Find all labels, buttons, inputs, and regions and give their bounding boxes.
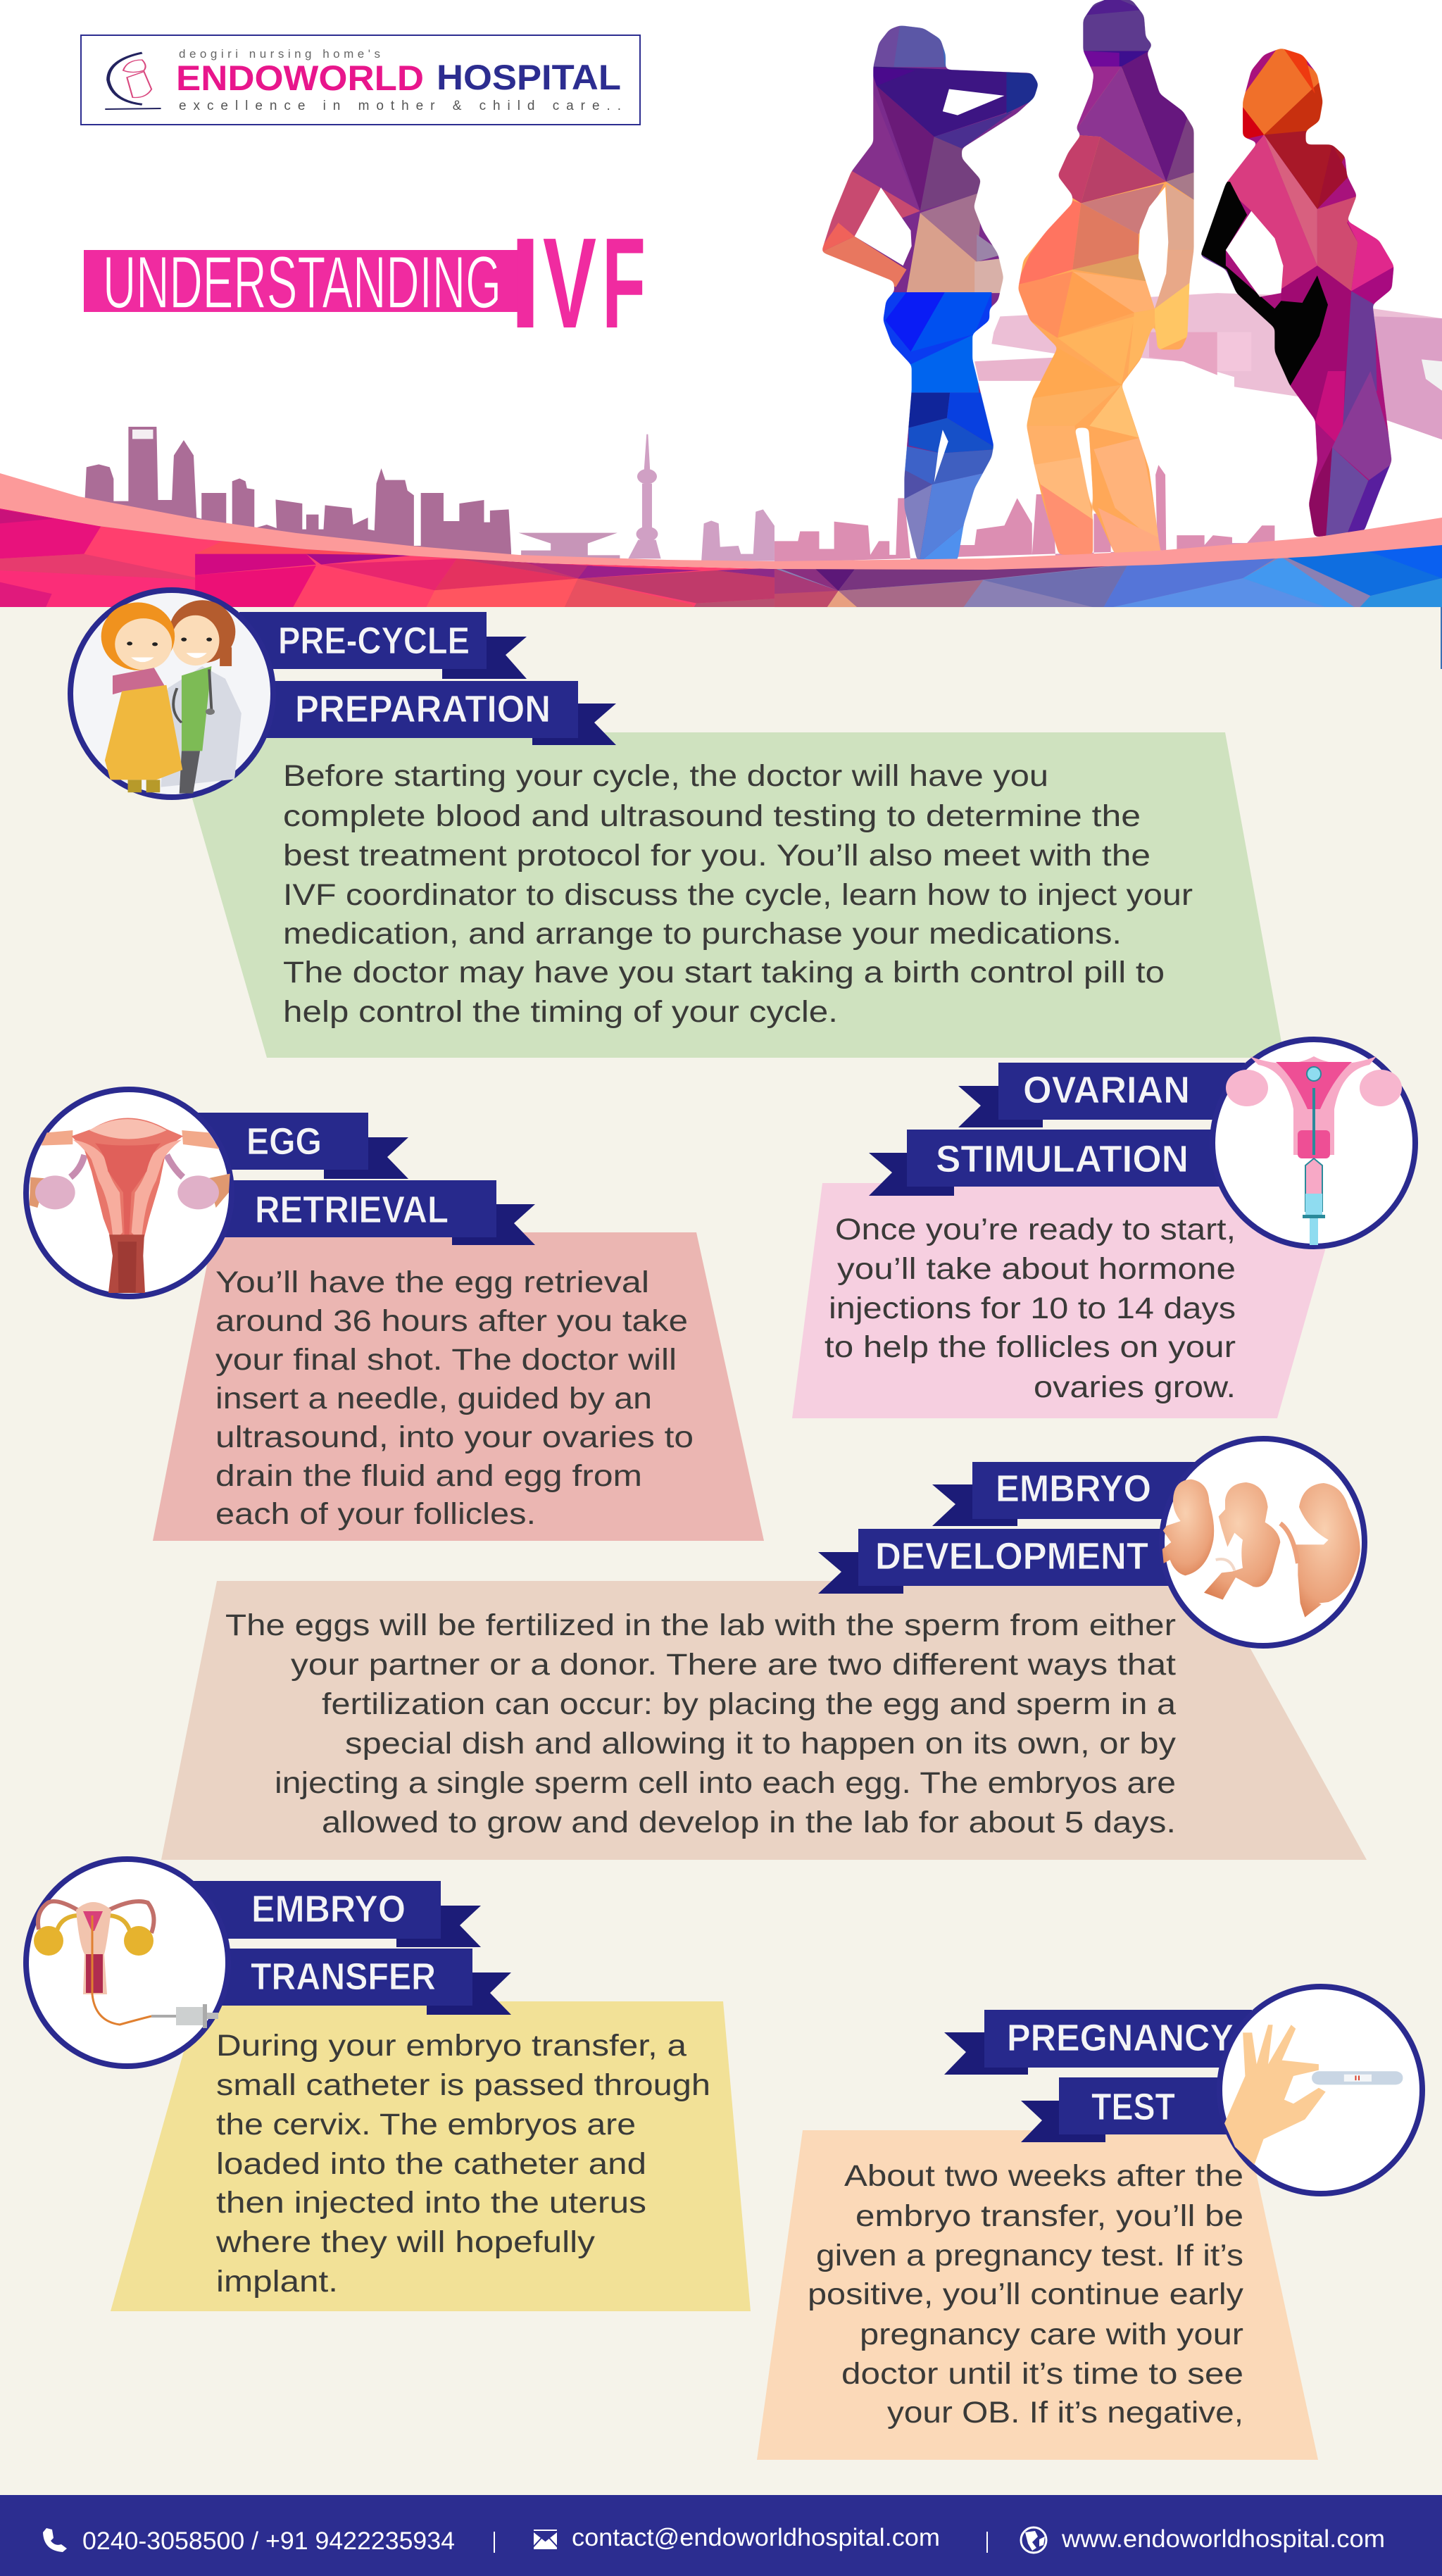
icon: globe bbox=[1021, 2527, 1046, 2553]
icon: patient and doctor bbox=[70, 590, 273, 797]
body text: allowed to grow and develop in the lab for about 5 days. bbox=[322, 1806, 1176, 1839]
title word: IVF: I bbox=[510, 211, 541, 355]
body text: Once you’re ready to start, bbox=[835, 1213, 1236, 1246]
silhouette: central pregnant woman bbox=[1013, 0, 1200, 563]
ribbon: pregnancy bbox=[944, 2010, 1252, 2075]
body text bbox=[283, 759, 1193, 1029]
body text: The eggs will be fertilized in the lab with the sperm from either bbox=[225, 1608, 1176, 1642]
body text: ultrasound, into your ovaries to bbox=[215, 1420, 694, 1454]
body text: special dish and allowing it to happen on its own, or by bbox=[345, 1727, 1177, 1761]
body text: injections for 10 to 14 days bbox=[829, 1292, 1236, 1325]
panel: pink bbox=[792, 1183, 1344, 1418]
ribbon: egg: EGG bbox=[246, 1120, 322, 1163]
body text bbox=[215, 1265, 694, 1531]
body text: Before starting your cycle, the doctor will have you bbox=[283, 759, 1048, 793]
body text: given a pregnancy test. If it’s bbox=[816, 2239, 1243, 2272]
body text bbox=[825, 1213, 1236, 1404]
icon: embryo transfer into uterus bbox=[1212, 1039, 1415, 1246]
website: www.endoworldhospital.com bbox=[1061, 2525, 1385, 2553]
ribbon: development bbox=[818, 1529, 1168, 1594]
ribbon: egg bbox=[197, 1113, 408, 1179]
panel: beige bbox=[161, 1581, 1367, 1860]
logo name: hospital: HOSPITAL bbox=[437, 58, 621, 97]
ribbon: transfer: TRANSFER bbox=[251, 1956, 436, 1998]
silhouette: woman with blue trousers bbox=[822, 25, 1038, 559]
phone numbers: 0240-3058500 / +91 9422235934 bbox=[82, 2527, 455, 2555]
title word: IVF bbox=[510, 211, 646, 355]
body text: injecting a single sperm cell into each egg. The embryos are bbox=[275, 1766, 1176, 1800]
section: pre-cycle preparation bbox=[70, 590, 1284, 1058]
ribbon: pregnancy: PREGNANCY bbox=[1007, 2017, 1234, 2059]
body text: loaded into the catheter and bbox=[216, 2147, 646, 2181]
footer bar bbox=[0, 2495, 1442, 2576]
logo name: endoworld: ENDOWORLD bbox=[176, 58, 424, 98]
panel: green bbox=[173, 732, 1284, 1058]
section: egg retrieval bbox=[26, 1089, 764, 1541]
icon: uterus bbox=[26, 1089, 232, 1296]
body text: the cervix. The embryos are bbox=[216, 2108, 636, 2142]
body text: small catheter is passed through bbox=[216, 2068, 710, 2102]
email address: contact@endoworldhospital.com bbox=[572, 2524, 940, 2551]
ribbon: ovarian: OVARIAN bbox=[1023, 1069, 1190, 1111]
logo tagline top: deogiri nursing home's bbox=[179, 47, 380, 61]
body text: You’ll have the egg retrieval bbox=[215, 1265, 649, 1299]
icon: hand holding pregnancy test bbox=[1220, 1987, 1422, 2194]
section: embryo transfer bbox=[26, 1859, 751, 2311]
body text bbox=[808, 2159, 1244, 2430]
section: ovarian stimulation bbox=[792, 1039, 1415, 1418]
body text: you’ll take about hormone bbox=[837, 1252, 1236, 1286]
ribbon: test bbox=[1021, 2077, 1228, 2142]
body text: where they will hopefully bbox=[215, 2225, 596, 2259]
body text: About two weeks after the bbox=[844, 2159, 1243, 2193]
panel: yellow bbox=[111, 2001, 751, 2311]
ribbon: pre-cycle: PRE-CYCLE bbox=[278, 620, 470, 662]
ribbon: embryo bbox=[932, 1462, 1198, 1526]
ribbon: stimulation bbox=[869, 1130, 1222, 1196]
panel: rose bbox=[153, 1232, 764, 1541]
body text: positive, you’ll continue early bbox=[808, 2277, 1244, 2311]
icon: envelope bbox=[533, 2529, 558, 2550]
separator bbox=[494, 2532, 495, 2553]
section: pregnancy test bbox=[757, 1987, 1422, 2460]
logo icon bbox=[105, 53, 161, 109]
body text bbox=[215, 2029, 710, 2299]
ribbon: ovarian bbox=[958, 1063, 1245, 1127]
body text: then injected into the uterus bbox=[216, 2186, 646, 2220]
ribbon: preparation: PREPARATION bbox=[295, 688, 551, 730]
title word: understanding: UNDERSTANDING bbox=[103, 242, 501, 324]
body text: each of your follicles. bbox=[215, 1497, 536, 1531]
body text: pregnancy care with your bbox=[860, 2318, 1243, 2351]
logo tagline bottom: excellence in mother & child care.. bbox=[179, 99, 621, 113]
wave band right bbox=[0, 473, 1442, 609]
body text: fertilization can occur: by placing the egg and sperm in a bbox=[322, 1687, 1176, 1721]
body text: embryo transfer, you’ll be bbox=[855, 2199, 1243, 2233]
body text: medication, and arrange to purchase your medications. bbox=[283, 917, 1122, 951]
ribbon: preparation bbox=[246, 681, 616, 745]
body text: implant. bbox=[216, 2265, 338, 2299]
ribbon: retrieval bbox=[211, 1180, 535, 1245]
title word: IVF: F bbox=[602, 211, 646, 355]
ribbon: embryo: EMBRYO bbox=[251, 1888, 406, 1930]
ribbon: test: TEST bbox=[1091, 2086, 1175, 2128]
icon: phone bbox=[43, 2528, 67, 2552]
body text: your partner or a donor. There are two different ways that bbox=[291, 1648, 1176, 1682]
icon: three fetuses bbox=[1162, 1439, 1365, 1646]
ribbon: embryo bbox=[190, 1881, 481, 1947]
body text: your final shot. The doctor will bbox=[215, 1343, 677, 1377]
body text: help control the timing of your cycle. bbox=[283, 995, 838, 1029]
ribbon: embryo: EMBRYO bbox=[996, 1468, 1151, 1510]
separator bbox=[986, 2532, 988, 2553]
ribbon: development: DEVELOPMENT bbox=[875, 1535, 1148, 1577]
title bbox=[84, 211, 646, 355]
panel: peach bbox=[757, 2130, 1318, 2460]
body text: drain the fluid and egg from bbox=[215, 1459, 642, 1493]
ribbon: pre-cycle bbox=[239, 612, 527, 679]
ribbon: transfer bbox=[204, 1949, 511, 2015]
brush stroke and city skyline right bbox=[775, 293, 1442, 563]
body text: best treatment protocol for you. You’ll also meet with the bbox=[283, 839, 1151, 873]
body text: During your embryo transfer, a bbox=[216, 2029, 686, 2063]
city skyline left bbox=[85, 427, 775, 561]
body text: insert a needle, guided by an bbox=[215, 1382, 652, 1415]
header: white hero area bbox=[0, 0, 1442, 669]
body text: your OB. If it’s negative, bbox=[887, 2396, 1243, 2430]
ribbon: stimulation: STIMULATION bbox=[936, 1138, 1189, 1180]
body text: complete blood and ultrasound testing to determine the bbox=[283, 799, 1141, 833]
icon: uterus with catheter bbox=[26, 1859, 228, 2066]
body text: to help the follicles on your bbox=[825, 1330, 1236, 1364]
body text: ovaries grow. bbox=[1034, 1370, 1236, 1404]
section: embryo development bbox=[161, 1439, 1367, 1860]
body text: doctor until it’s time to see bbox=[841, 2357, 1243, 2391]
body text bbox=[225, 1608, 1177, 1839]
body text: The doctor may have you start taking a birth control pill to bbox=[283, 956, 1165, 989]
title word: IVF: V bbox=[543, 211, 596, 355]
body text: IVF coordinator to discuss the cycle, learn how to inject your bbox=[283, 878, 1193, 912]
wave band left bbox=[0, 507, 775, 611]
body text: around 36 hours after you take bbox=[215, 1304, 688, 1338]
logo bbox=[81, 35, 640, 125]
ribbon: retrieval: RETRIEVAL bbox=[255, 1189, 449, 1231]
silhouette: woman with black sleeve bbox=[1196, 43, 1400, 543]
